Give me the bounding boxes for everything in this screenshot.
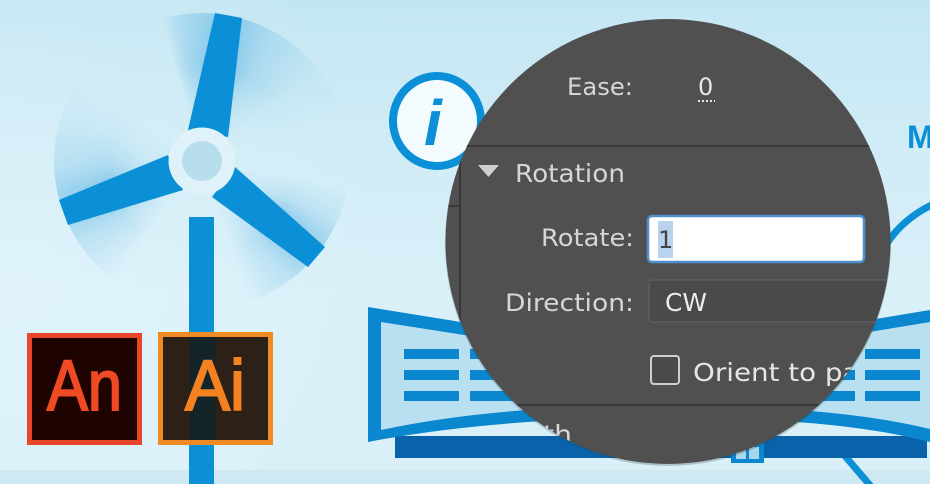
right arc xyxy=(884,203,930,248)
logo: Adobe Illustrator: Ai xyxy=(185,347,245,426)
field: rotate xyxy=(541,216,864,262)
bottom right leg xyxy=(845,456,874,484)
book spine tab xyxy=(731,436,764,463)
magnifier panel xyxy=(440,15,909,470)
field: ease: Ease: xyxy=(567,73,633,101)
left page xyxy=(368,307,560,442)
field: rotate: Rotate: xyxy=(541,224,634,252)
windmill motion blur xyxy=(54,13,350,309)
field: direction xyxy=(505,280,909,322)
field: rotate: 1 xyxy=(658,226,673,254)
windmill pole xyxy=(189,217,214,484)
field: ease xyxy=(569,77,715,102)
icon: info circle: i xyxy=(424,87,443,159)
field: direction: CW xyxy=(665,288,707,317)
panel dividers xyxy=(448,145,870,406)
logo: Adobe Animate xyxy=(30,336,140,442)
section heading: rotation xyxy=(478,163,623,182)
right page xyxy=(760,310,930,442)
book base xyxy=(395,436,927,458)
logo: Adobe Illustrator xyxy=(160,334,270,442)
magnifier panel shadow xyxy=(445,20,891,466)
section heading: path: Path xyxy=(510,420,572,449)
right page text lines xyxy=(800,349,920,401)
left page text lines xyxy=(404,349,525,401)
windmill blades xyxy=(59,13,325,267)
field: ease: 0 xyxy=(698,73,713,101)
checkbox: orient to path xyxy=(650,355,852,386)
checkbox: orient to path: Orient to path xyxy=(693,358,888,387)
windmill hub xyxy=(168,128,236,194)
section heading: rotation: Rotation xyxy=(515,159,625,188)
icon: info circle xyxy=(393,76,481,166)
windmill xyxy=(59,13,325,484)
field: direction: Direction: xyxy=(505,289,634,317)
logo: Adobe Animate: An xyxy=(47,347,122,426)
open book xyxy=(368,307,930,463)
ground band xyxy=(0,470,930,484)
